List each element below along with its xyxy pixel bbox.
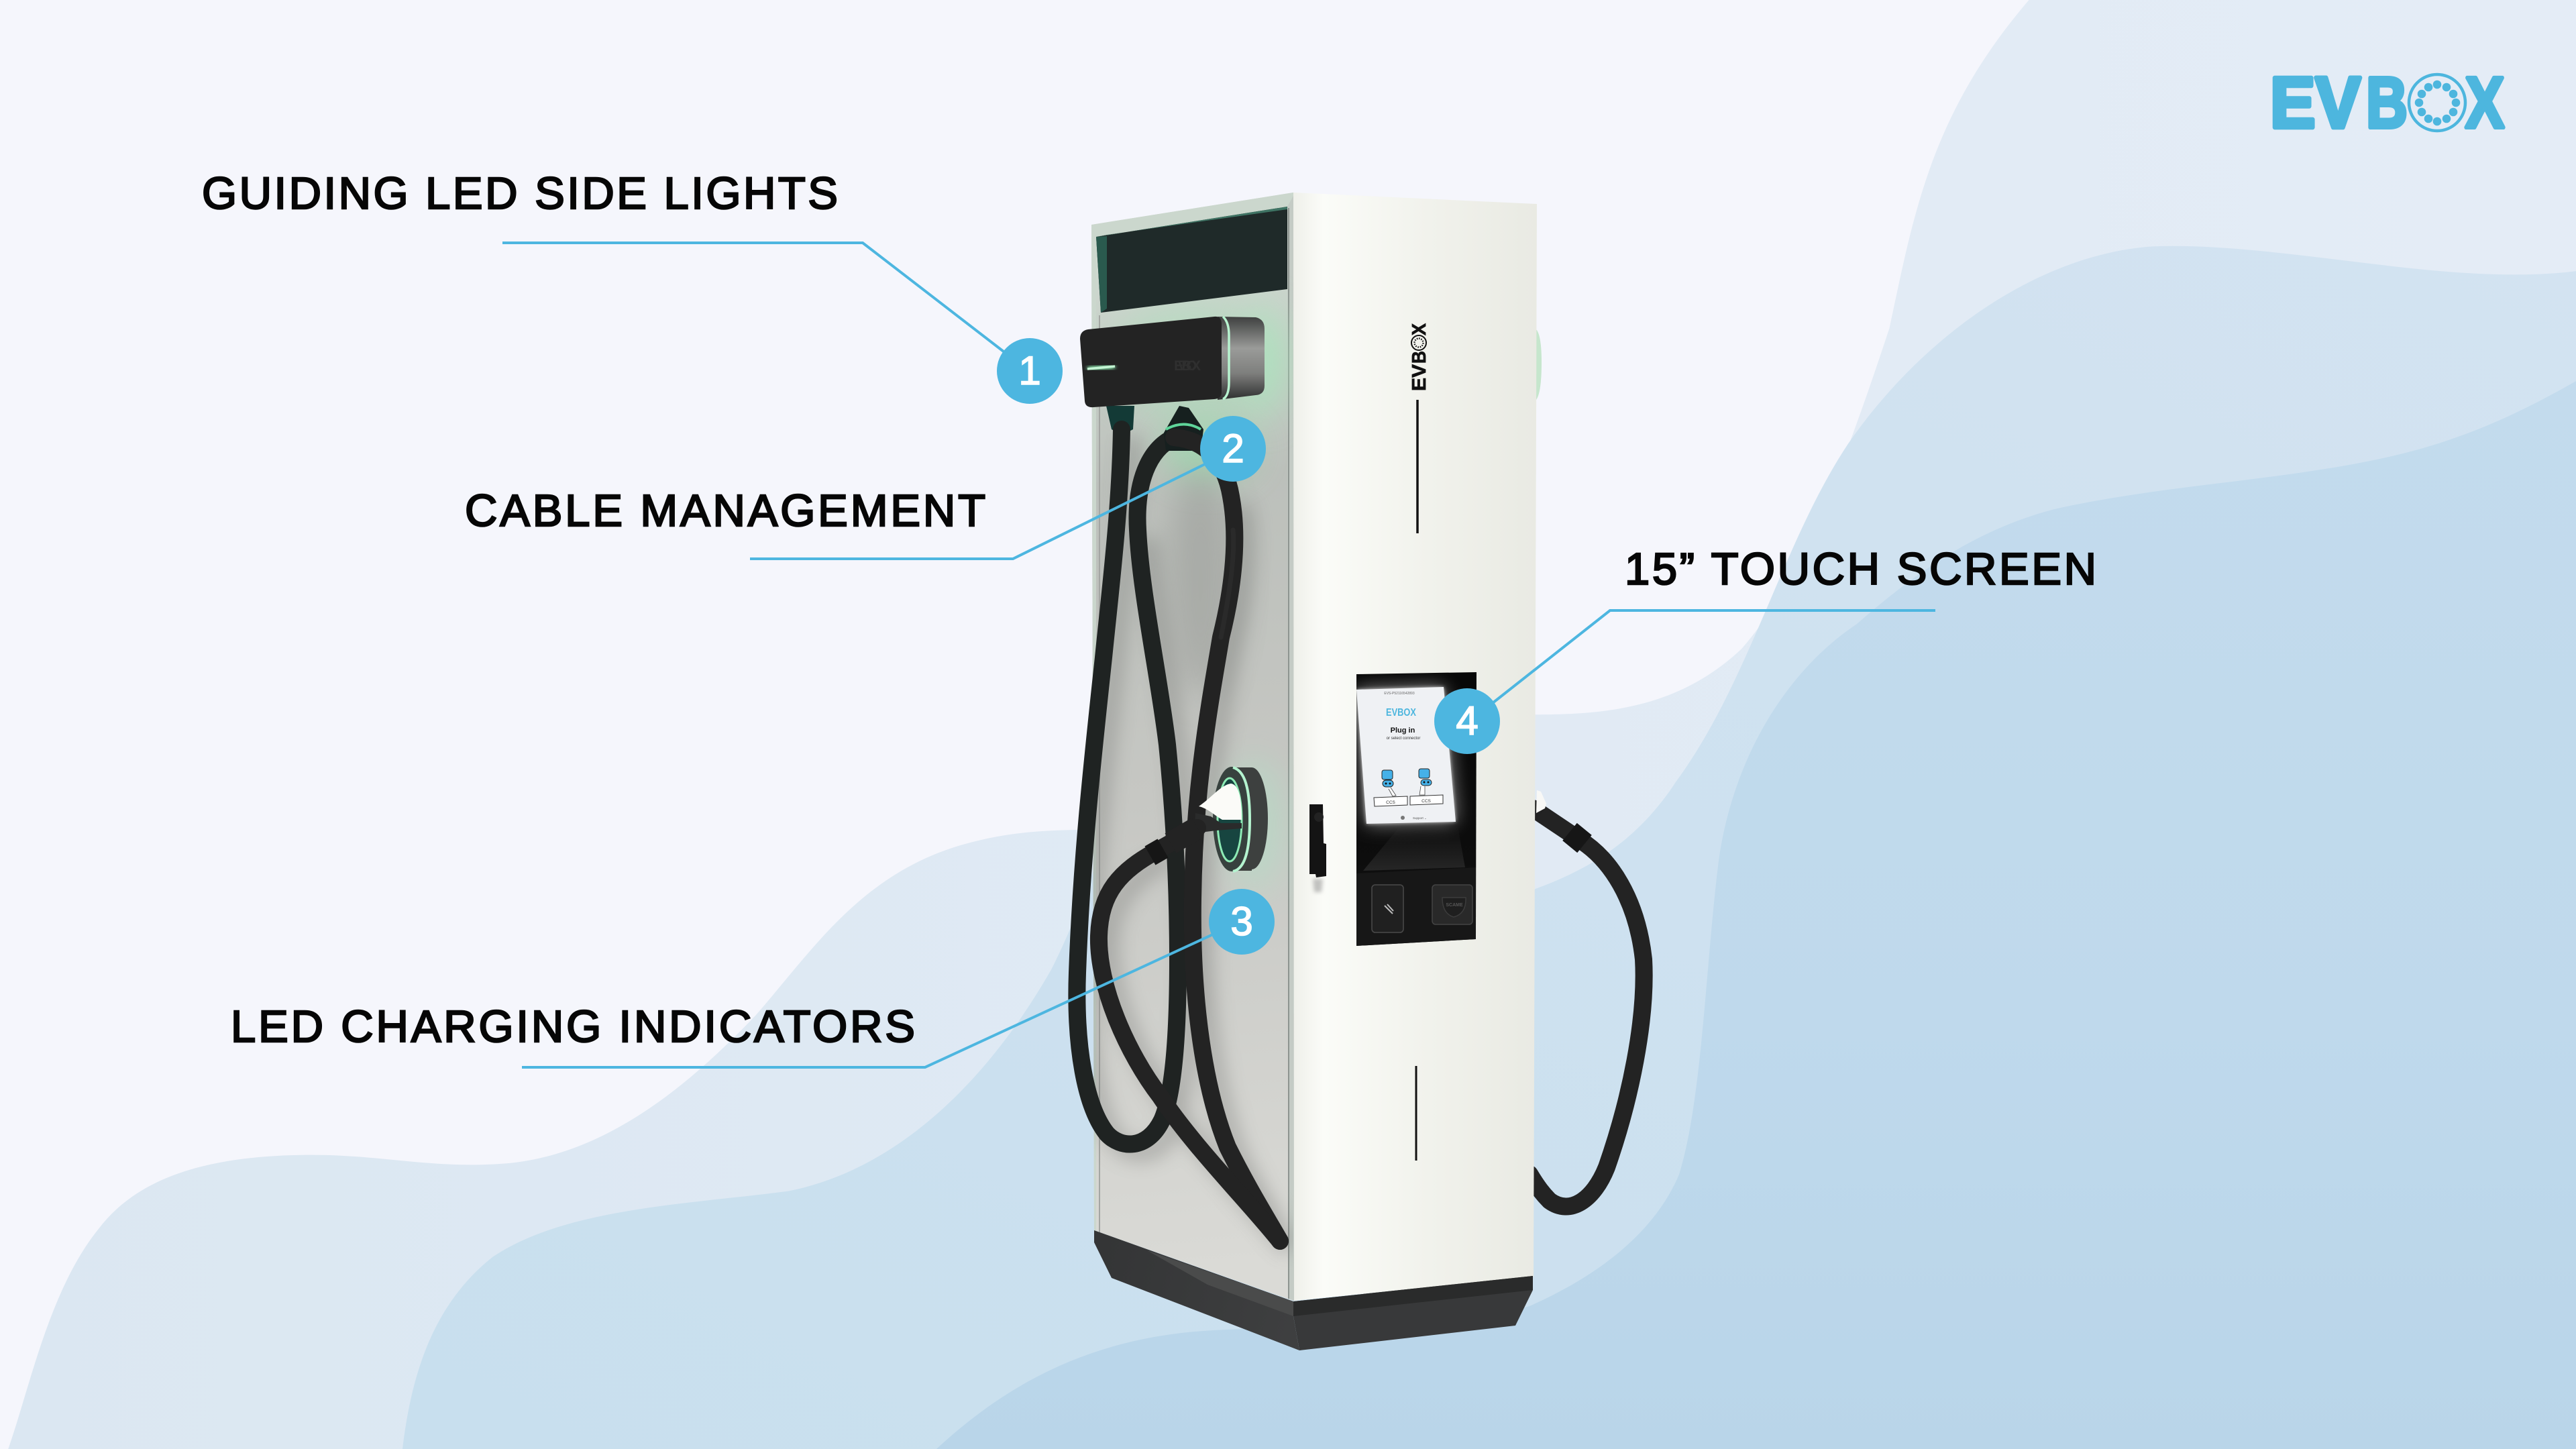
connector icon right (1419, 769, 1432, 795)
label 4 text: 15” TOUCH SCREEN (1625, 544, 2096, 594)
front face (1293, 193, 1537, 1301)
callout 1: guiding LED side lights (202, 168, 1063, 404)
cable hook (1164, 406, 1203, 451)
logo: EVBOX: X (2465, 62, 2504, 143)
screen light reflection (1363, 822, 1465, 871)
touch screen: EVS-P52116542893 (1384, 692, 1415, 696)
marker 4: 4 (1456, 698, 1479, 743)
label 3 text: LED CHARGING INDICATORS (231, 1002, 915, 1052)
callout 3: LED charging indicators (231, 889, 1275, 1067)
connector icon left (1382, 770, 1396, 796)
right side LED light (1536, 329, 1542, 400)
cable right loop (1174, 437, 1280, 1241)
side logo: B (1409, 351, 1430, 364)
marker 2 (1200, 416, 1266, 482)
left face (1091, 193, 1293, 1301)
marker 3 (1209, 889, 1275, 955)
base (1094, 1230, 1533, 1350)
touch screen: Support ⌄ (1413, 816, 1427, 820)
upper line (1416, 400, 1419, 533)
holster plug (1194, 784, 1242, 840)
leader line 4 (1493, 610, 1935, 703)
socket: SCAME (1446, 903, 1463, 908)
logo: EVBOX (2270, 62, 2504, 143)
touch screen: EVBOX (1386, 707, 1417, 718)
side logo: X (1409, 323, 1430, 335)
label 1 text: GUIDING LED SIDE LIGHTS (202, 168, 838, 219)
touch screen: Plug in (1391, 727, 1415, 735)
side logo: EV (1409, 364, 1430, 391)
touch screen (1356, 687, 1456, 824)
charger (1077, 193, 1644, 1350)
charger head: EVBOX (1174, 358, 1201, 374)
connector button left (1374, 796, 1407, 806)
marker 3: 3 (1230, 899, 1253, 944)
logo: EVBOX: B (2366, 62, 2408, 143)
callout 4: touch screen (1434, 544, 2096, 754)
leader line 2 (750, 463, 1208, 559)
cable shadows (1087, 437, 1291, 1249)
callout 2: cable management (465, 416, 1266, 559)
label 2 text: CABLE MANAGEMENT (465, 486, 985, 536)
marker 2: 2 (1222, 426, 1244, 471)
lower line (1415, 1066, 1417, 1161)
green glow (1087, 302, 1291, 1249)
screen housing (1356, 672, 1477, 946)
connector button right: CCS (1421, 799, 1432, 804)
card reader (1372, 885, 1403, 932)
side logo (1409, 323, 1430, 391)
charger head (1080, 317, 1265, 407)
cable highlights (1221, 530, 1234, 637)
lower control panel (1356, 867, 1476, 946)
right cable (1529, 790, 1644, 1207)
leader line 1 (502, 243, 1004, 352)
logo: EVBOX: EV (2270, 62, 2361, 143)
left face frame (1091, 193, 1293, 1233)
charging holster (1213, 767, 1268, 871)
marker 4 (1434, 688, 1500, 754)
left face edge strip (1287, 195, 1294, 1301)
screen glow (1356, 687, 1456, 824)
cable left outer (1077, 406, 1178, 1144)
recess (1096, 207, 1287, 313)
leader line 3 (522, 934, 1214, 1067)
connector button right (1410, 795, 1443, 805)
socket (1432, 885, 1472, 924)
door handle (1309, 804, 1326, 892)
connector button left: CCS (1386, 800, 1396, 805)
marker 1 (997, 338, 1063, 404)
cable from plug (1099, 828, 1280, 1241)
touch screen: or select connector (1387, 737, 1420, 741)
marker 1: 1 (1018, 348, 1041, 393)
